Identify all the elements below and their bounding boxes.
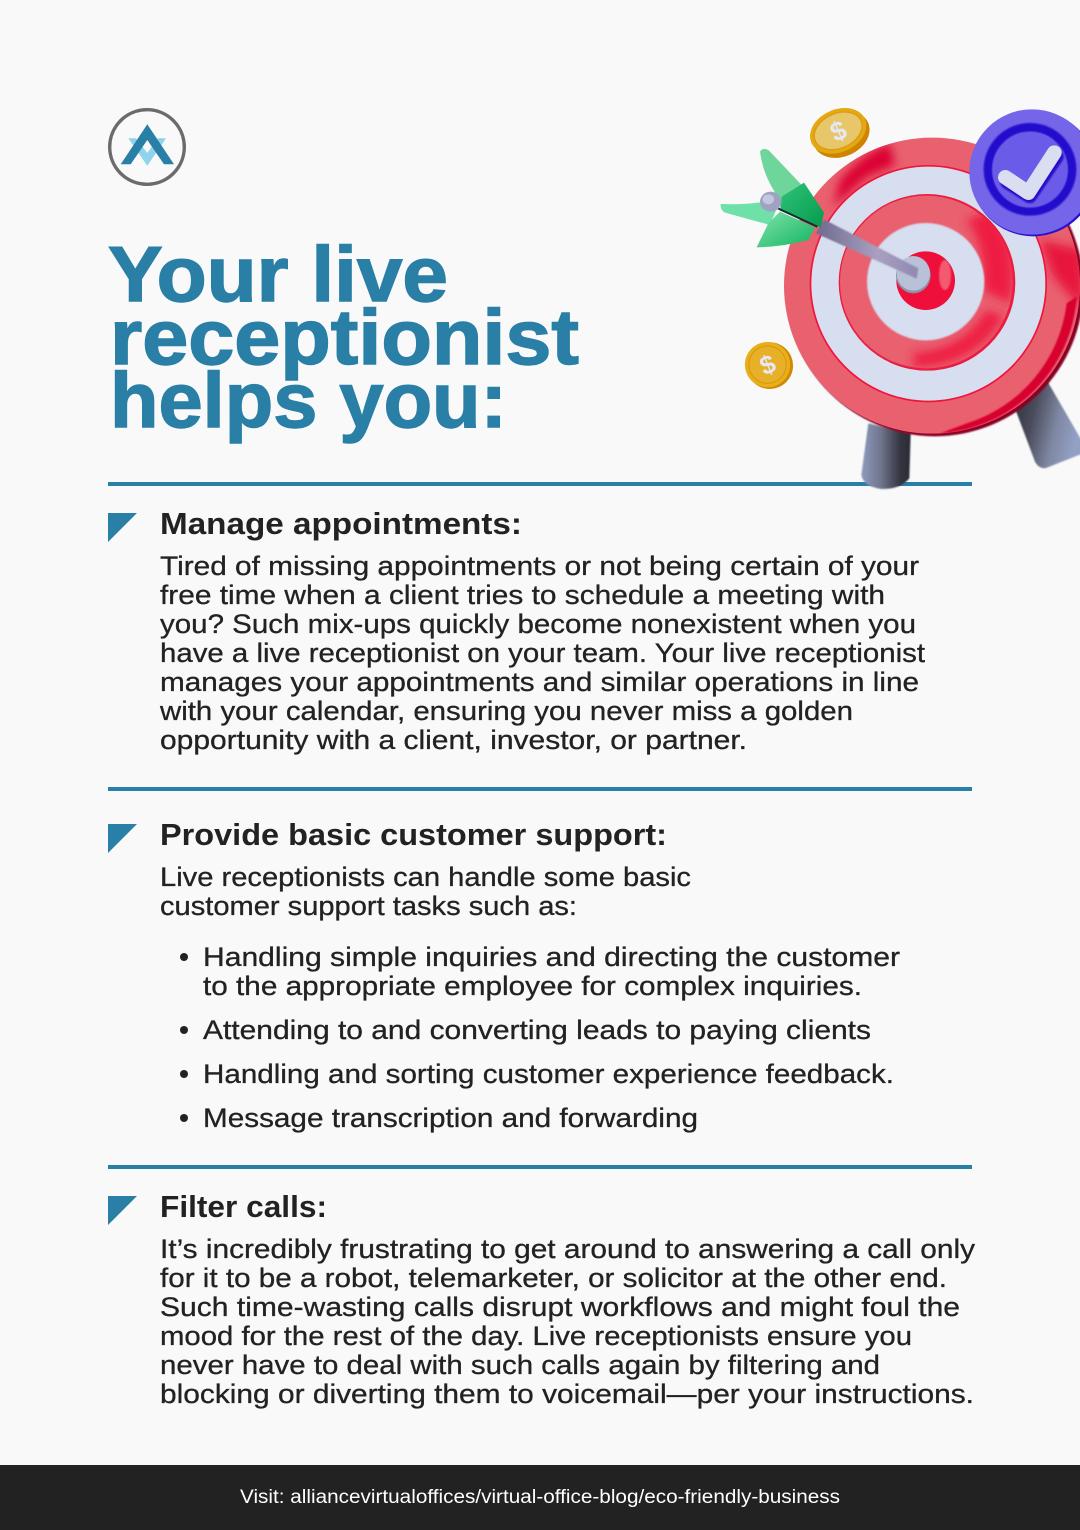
panel: customer support xyxy=(108,817,900,1133)
text block: have a live receptionist on your team. Your live receptionist xyxy=(160,638,926,668)
title: helps you: xyxy=(110,356,507,444)
text block: opportunity with a client, investor, or partner. xyxy=(160,725,747,755)
footer: Visit: alliancevirtualoffices/virtual-office-blog/eco-friendly-business xyxy=(240,1487,840,1508)
text block: It’s incredibly frustrating to get around to answering a call only xyxy=(160,1234,976,1264)
text block: blocking or diverting them to voicemail—per your instructions. xyxy=(160,1379,974,1409)
text block: Tired of missing appointments or not being certain of your xyxy=(160,551,919,581)
divider line lower xyxy=(108,1165,972,1169)
icon: dart fletching xyxy=(721,149,824,247)
text block xyxy=(160,862,691,921)
bullet list: Handling simple inquiries and directing the customer xyxy=(203,942,900,972)
icon: coin bottom xyxy=(738,334,800,396)
text block: customer support tasks such as: xyxy=(160,891,577,921)
bullet list: Attending to and converting leads to paying clients xyxy=(203,1015,871,1045)
text block: for it to be a robot, telemarketer, or solicitor at the other end. xyxy=(160,1263,947,1293)
heading: Manage appointments: xyxy=(160,506,522,541)
text block: never have to deal with such calls again by filtering and xyxy=(160,1350,880,1380)
title xyxy=(108,230,579,444)
bullet list: to the appropriate employee for complex inquiries. xyxy=(203,971,862,1001)
logo xyxy=(110,110,184,184)
icon: target board xyxy=(784,138,1080,436)
panel: manage appointments xyxy=(108,506,926,755)
icon: check badge xyxy=(969,109,1080,236)
heading: Filter calls: xyxy=(160,1189,327,1224)
text block: with your calendar, ensuring you never miss a golden xyxy=(159,696,853,726)
icon: coin top xyxy=(803,99,877,167)
icon: triangle marker xyxy=(108,1196,137,1225)
icon: target leg left xyxy=(861,423,911,489)
icon: dart shaft xyxy=(816,219,918,279)
icon: coin top: $ xyxy=(825,114,851,148)
divider line middle xyxy=(108,787,972,791)
divider line top xyxy=(108,482,972,486)
illustration: target with dart, coins and check badge xyxy=(721,99,1080,489)
footer xyxy=(0,1465,1080,1530)
text block xyxy=(160,1234,976,1409)
text block xyxy=(159,551,926,755)
text block: mood for the rest of the day. Live receptionists ensure you xyxy=(160,1321,912,1351)
icon: triangle marker xyxy=(108,513,137,542)
icon: dart impact disc xyxy=(896,256,931,293)
text block: you? Such mix-ups quickly become nonexistent when you xyxy=(160,609,916,639)
text block: Live receptionists can handle some basic xyxy=(160,862,691,892)
icon: triangle marker xyxy=(108,824,137,853)
bullet list: Handling and sorting customer experience feedback. xyxy=(203,1059,894,1089)
heading: Provide basic customer support: xyxy=(160,817,667,852)
text block: manages your appointments and similar operations in line xyxy=(160,667,919,697)
title: Your live xyxy=(108,230,448,318)
icon: target leg right xyxy=(1015,380,1080,468)
icon: coin bottom: $ xyxy=(755,348,780,381)
text block: Such time-wasting calls disrupt workflows and might foul the xyxy=(160,1292,960,1322)
panel: filter calls xyxy=(108,1189,976,1409)
title: receptionist xyxy=(110,293,579,381)
text block: free time when a client tries to schedule a meeting with xyxy=(160,580,885,610)
bullet list xyxy=(180,942,900,1133)
bullet list: Message transcription and forwarding xyxy=(203,1103,698,1133)
